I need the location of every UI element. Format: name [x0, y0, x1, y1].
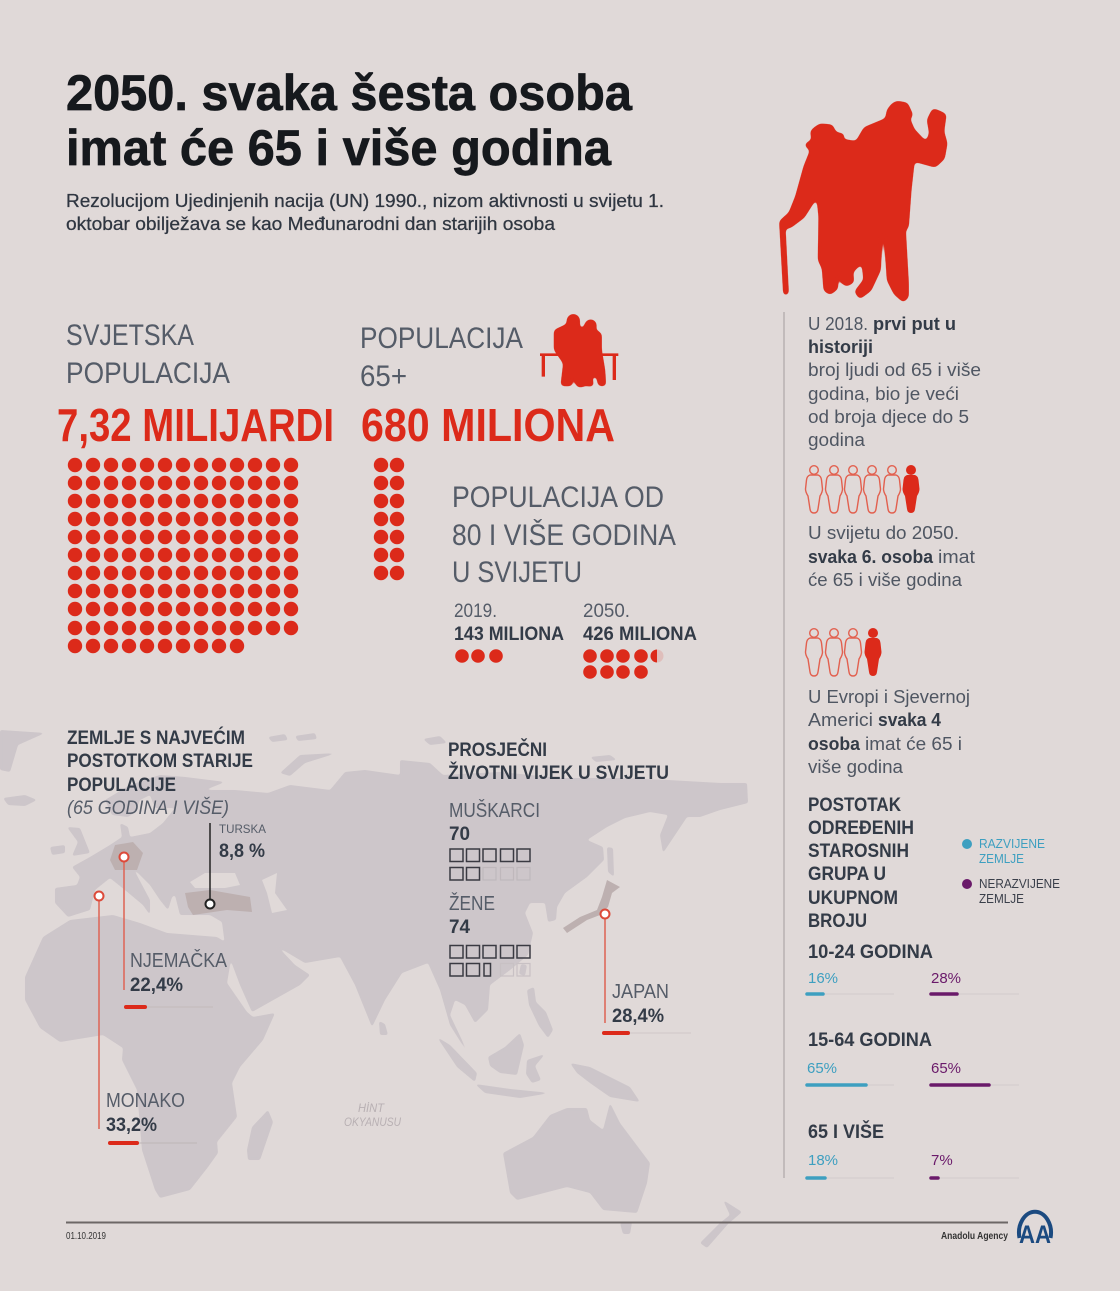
text: 2018 fact: U 2018.	[808, 314, 868, 334]
callout: Turkey: TURSKA	[219, 822, 266, 836]
text: 2018 fact	[808, 314, 981, 450]
callout: Germany: NJEMAČKA	[130, 949, 228, 972]
subtitle	[66, 191, 664, 234]
heading: life expectancy: PROSJEČNI	[448, 739, 547, 761]
value: population 65+: 680 MILIONA	[361, 399, 615, 451]
bars: 10-24 years: 10-24 GODINA	[808, 942, 933, 963]
population 65+ heading	[360, 322, 523, 393]
bars: 15-64 years: 65%	[931, 1060, 961, 1077]
map highlight: Japan	[563, 880, 620, 933]
stat: 2050: 2050.	[583, 601, 630, 622]
vertical divider	[783, 312, 785, 1178]
subtitle: Rezolucijom Ujedinjenih nacija (UN) 1990., nizom aktivnosti u svijetu 1.	[66, 191, 664, 211]
callout: Japan: 28,4%	[612, 1006, 664, 1027]
title	[66, 65, 633, 176]
legend	[962, 837, 1060, 906]
bars: 65 and over	[806, 1121, 1019, 1178]
legend: NERAZVIJENE	[979, 877, 1060, 891]
heading: countries with largest older population: ZEMLJE S NAJVEĆIM	[67, 727, 245, 749]
icon row: one in four people	[806, 628, 882, 676]
text: 2050 fact: U svijetu do 2050.	[808, 523, 959, 543]
bars: 65 and over: 65 I VIŠE	[808, 1121, 884, 1143]
stat: 2019	[454, 601, 564, 663]
footer rule	[66, 1222, 1008, 1224]
callout: Monaco: MONAKO	[106, 1090, 185, 1112]
footer agency name: Anadolu Agency	[941, 1231, 1008, 1242]
bars: 15-64 years	[806, 1030, 1019, 1085]
heading: age group share: POSTOTAK	[808, 795, 901, 816]
callout: Turkey: 8,8 %	[219, 841, 265, 862]
text: 2018 fact: historiji	[808, 337, 873, 357]
icon: elderly couple silhouette	[781, 101, 946, 301]
world population heading	[66, 319, 230, 390]
world map background	[0, 730, 748, 1248]
heading: age group share: STAROSNIH	[808, 841, 909, 862]
value: world population: 7,32 MILIJARDI	[57, 399, 334, 451]
dot grid: world population	[75, 465, 292, 646]
text: Europe and North America fact: imat će 65 i	[865, 734, 962, 754]
life expectancy: women	[449, 892, 530, 976]
heading: age group share: UKUPNOM	[808, 888, 898, 909]
text: 2050 fact	[808, 523, 975, 590]
dot grid: population 65+	[374, 458, 404, 580]
life expectancy: men: MUŠKARCI	[449, 799, 540, 822]
legend: RAZVIJENE	[979, 837, 1045, 851]
heading: countries with largest older population: (65 GODINA I VIŠE)	[67, 797, 229, 819]
heading: life expectancy: ŽIVOTNI VIJEK U SVIJETU	[448, 762, 669, 784]
text: Europe and North America fact: Americi	[808, 710, 873, 730]
icon: agency logo	[1019, 1212, 1051, 1249]
stat: 2050	[583, 601, 697, 679]
icon: agency logo: AA	[1019, 1221, 1051, 1249]
text: 2050 fact: svaka 6. osoba	[808, 547, 934, 567]
stat: 2050: 426 MILIONA	[583, 624, 697, 645]
callout: Monaco	[94, 892, 197, 1143]
inland seas	[190, 873, 287, 913]
text: Europe and North America fact	[808, 687, 970, 777]
callout: Japan: JAPAN	[612, 981, 669, 1003]
text: Europe and North America fact: svaka 4	[878, 710, 941, 730]
bars: 65 and over: 18%	[808, 1152, 838, 1169]
life expectancy: men: 70	[449, 824, 470, 845]
label: Indian Ocean: OKYANUSU	[344, 1115, 401, 1129]
life expectancy: women: 74	[449, 917, 470, 938]
map highlight: Germany	[110, 842, 143, 870]
stat: 2019: 2019.	[454, 601, 497, 622]
legend: ZEMLJE	[979, 852, 1024, 866]
map highlight: Turkey	[185, 890, 252, 915]
heading: countries with largest older population: POSTOTKOM STARIJE	[67, 751, 253, 772]
text: 2018 fact: godina	[808, 430, 866, 450]
icon: couple on bench	[540, 314, 618, 387]
heading: life expectancy	[448, 739, 669, 784]
heading: age group share: GRUPA U	[808, 864, 886, 885]
callout: Monaco: 33,2%	[106, 1115, 157, 1136]
bars: 65 and over: 7%	[931, 1152, 953, 1169]
callout: Japan	[600, 910, 691, 1033]
callout: Germany	[120, 852, 228, 1007]
text: 2050 fact: imat	[938, 547, 975, 567]
heading: age group share: BROJU	[808, 911, 867, 932]
heading: population 80+	[452, 481, 676, 589]
population 65+ heading: POPULACIJA	[360, 322, 523, 355]
text: 2018 fact: godina, bio je veći	[808, 384, 959, 404]
bars: 15-64 years: 15-64 GODINA	[808, 1030, 932, 1051]
footer date: 01.10.2019	[66, 1231, 106, 1242]
legend: ZEMLJE	[979, 892, 1024, 906]
heading: age group share: ODREĐENIH	[808, 818, 914, 839]
text: Europe and North America fact: osoba	[808, 734, 861, 754]
heading: countries with largest older population	[67, 727, 253, 819]
world population heading: SVJETSKA	[66, 319, 194, 352]
heading: population 80+: POPULACIJA OD	[452, 481, 664, 514]
stat: 2019: 143 MILIONA	[454, 624, 564, 645]
world population heading: POPULACIJA	[66, 357, 230, 390]
title: 2050. svaka šesta osoba	[66, 65, 633, 121]
text: 2018 fact: prvi put u	[873, 314, 956, 334]
callout: Turkey	[206, 822, 266, 908]
heading: countries with largest older population: POPULACIJE	[67, 775, 176, 796]
text: 2018 fact: broj ljudi od 65 i više	[808, 360, 981, 380]
title: imat će 65 i više godina	[66, 120, 612, 176]
bars: 10-24 years: 16%	[808, 970, 838, 987]
bars: 10-24 years	[806, 942, 1019, 994]
text: Europe and North America fact: U Evropi i Sjevernoj	[808, 687, 970, 707]
bars: 15-64 years: 65%	[807, 1060, 837, 1077]
heading: population 80+: 80 I VIŠE GODINA	[452, 518, 676, 552]
text: 2050 fact: će 65 i više godina	[808, 570, 963, 590]
label: Indian Ocean: HİNT	[358, 1101, 386, 1115]
callout: Germany: 22,4%	[130, 975, 183, 996]
life expectancy: women: ŽENE	[449, 892, 495, 915]
life expectancy: men	[449, 799, 540, 880]
text: Europe and North America fact: više godina	[808, 757, 904, 777]
heading: population 80+: U SVIJETU	[452, 556, 582, 589]
label: Indian Ocean	[344, 1101, 401, 1129]
population 65+ heading: 65+	[360, 360, 407, 393]
icon row: one in six people	[806, 465, 920, 513]
bars: 10-24 years: 28%	[931, 970, 961, 987]
subtitle: oktobar obilježava se kao Međunarodni dan starijih osoba	[66, 214, 556, 234]
text: 2018 fact: od broja djece do 5	[808, 407, 969, 427]
heading: age group share	[808, 795, 914, 932]
